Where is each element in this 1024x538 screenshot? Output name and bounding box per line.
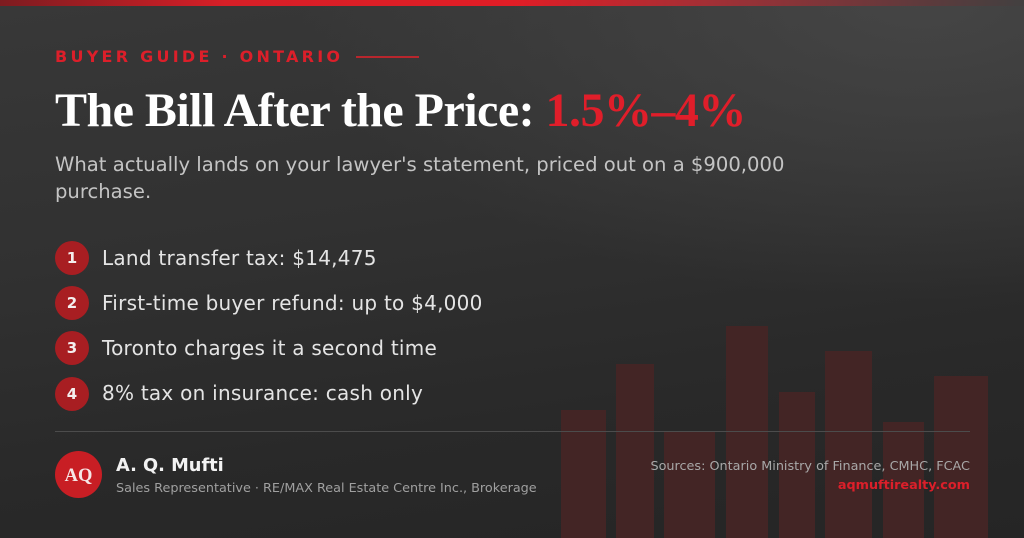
item 2 text: First-time buyer refund: up to $4,000 <box>102 291 483 315</box>
subtitle: What actually lands on your lawyer's statement, priced out on a $900,000 <box>55 153 784 176</box>
sources: Sources: Ontario Ministry of Finance, CMHC, FCAC <box>650 459 970 474</box>
list <box>55 241 483 411</box>
author role: Sales Representative · RE/MAX Real Estate Centre Inc., Brokerage <box>116 481 537 496</box>
avatar <box>55 451 102 498</box>
website: aqmuftirealty.com <box>838 478 970 493</box>
item 4 text: 8% tax on insurance: cash only <box>102 381 423 405</box>
title: The Bill After the Price: 1.5%–4% <box>55 84 746 137</box>
item 4 number: 4 <box>67 385 77 403</box>
item 3 text: Toronto charges it a second time <box>102 336 437 360</box>
item 4 number <box>55 377 89 411</box>
eyebrow rule <box>356 56 419 58</box>
top accent bar <box>0 0 1024 6</box>
subtitle <box>55 153 784 203</box>
eyebrow label: BUYER GUIDE · ONTARIO <box>55 47 343 66</box>
item 3 number: 3 <box>67 339 77 357</box>
item 1 number: 1 <box>67 249 77 267</box>
item 1 number <box>55 241 89 275</box>
subtitle: purchase. <box>55 180 151 203</box>
item 3 number <box>55 331 89 365</box>
footer divider <box>55 431 970 432</box>
item 2 number: 2 <box>67 294 77 312</box>
avatar: AQ <box>65 466 92 486</box>
author name: A. Q. Mufti <box>116 455 224 476</box>
item 2 number <box>55 286 89 320</box>
item 1 text: Land transfer tax: $14,475 <box>102 246 377 270</box>
